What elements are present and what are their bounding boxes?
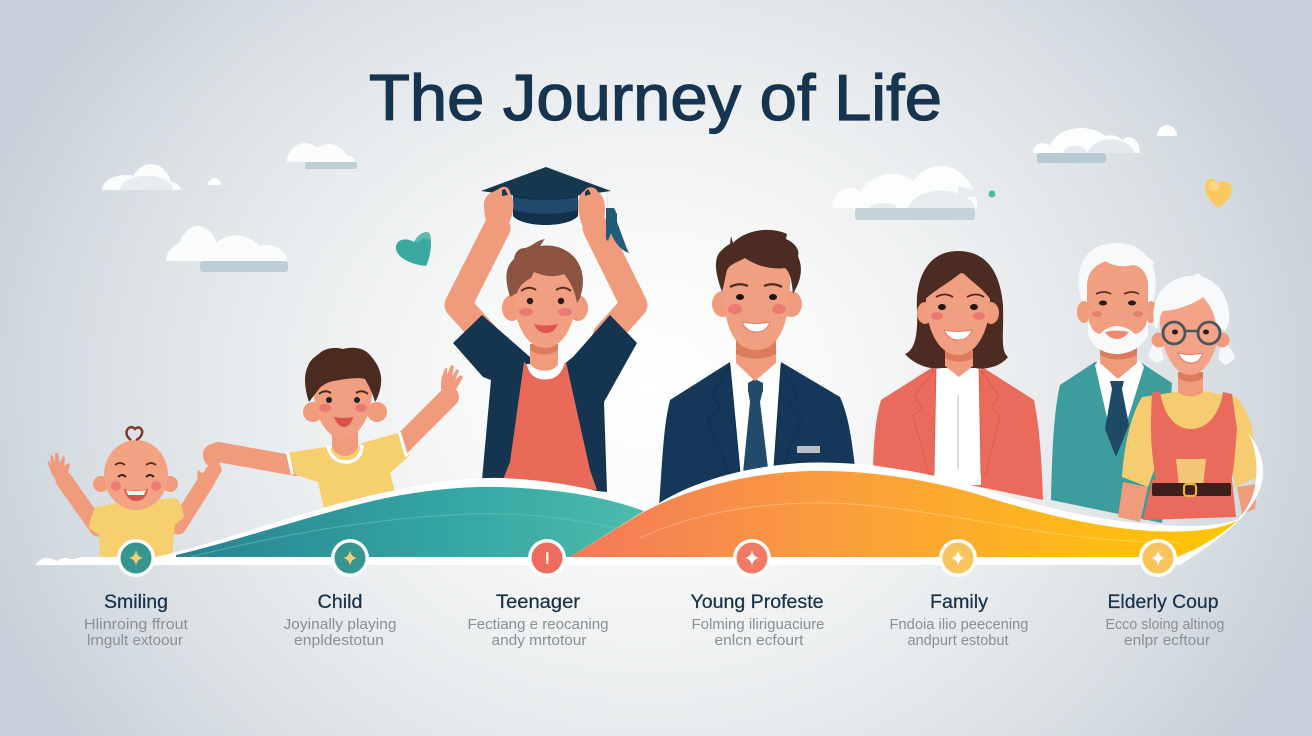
cloud: mid left	[166, 226, 288, 272]
figure: elderly man	[1051, 243, 1172, 523]
cloud: far left	[102, 164, 221, 190]
icon: yellow heart	[1205, 179, 1232, 208]
node: young professional	[733, 539, 771, 577]
wave: white outline	[156, 433, 1263, 565]
label: smiling	[84, 592, 189, 649]
label: elderly couple: Elderly Coup	[1108, 592, 1218, 613]
node: child	[331, 539, 369, 577]
cloud: top right	[1033, 125, 1177, 163]
label: teenager: Teenager	[496, 592, 581, 613]
label: family	[890, 592, 1028, 649]
label: smiling: lrngult extoour	[87, 632, 183, 649]
label: young professional: Folming iliriguaciure	[692, 616, 824, 633]
label: family: Family	[930, 592, 989, 613]
label: elderly couple: enlpr ecftour	[1124, 632, 1210, 649]
figure: woman	[873, 251, 1043, 500]
label: smiling: Smiling	[104, 592, 168, 613]
label: teenager: andy mrtotour	[492, 632, 586, 649]
wave: teal section	[176, 487, 644, 557]
label: young professional	[690, 592, 824, 649]
figure: young professional	[658, 230, 855, 517]
node: elderly couple	[1139, 539, 1177, 577]
label: young professional: Young Profeste	[690, 592, 824, 613]
figure: child	[203, 348, 463, 509]
label: child: Child	[318, 592, 362, 613]
figure: teenager	[453, 228, 637, 492]
figure: baby	[48, 427, 222, 557]
timeline line	[35, 557, 1180, 565]
label: smiling: Hlinroing ffrout	[84, 616, 189, 633]
label: teenager	[468, 592, 608, 649]
title: The Journey of Life	[369, 61, 942, 134]
node: smiling	[117, 539, 155, 577]
label: young professional: enlcn ecfourt	[714, 632, 804, 649]
label: child: Joyinally playing	[284, 616, 396, 633]
wave: orange section	[570, 471, 1238, 557]
icon: graduation cap	[481, 167, 629, 253]
label: family: Fndoia ilio peecening	[890, 616, 1028, 633]
cloud: right center	[832, 166, 996, 220]
label: child: enpldestotun	[294, 632, 384, 649]
label: teenager: Fectiang e reocaning	[468, 616, 608, 633]
label: elderly couple: Ecco sloing altinog	[1106, 616, 1224, 633]
cloud: upper left	[287, 143, 357, 169]
label: elderly couple	[1106, 592, 1224, 649]
icon: teal heart	[396, 232, 431, 266]
node: family	[939, 539, 977, 577]
label: child	[284, 592, 396, 649]
figure: elderly woman	[1118, 273, 1258, 522]
label: family: andpurt estobut	[908, 632, 1009, 649]
node: teenager	[528, 539, 566, 577]
